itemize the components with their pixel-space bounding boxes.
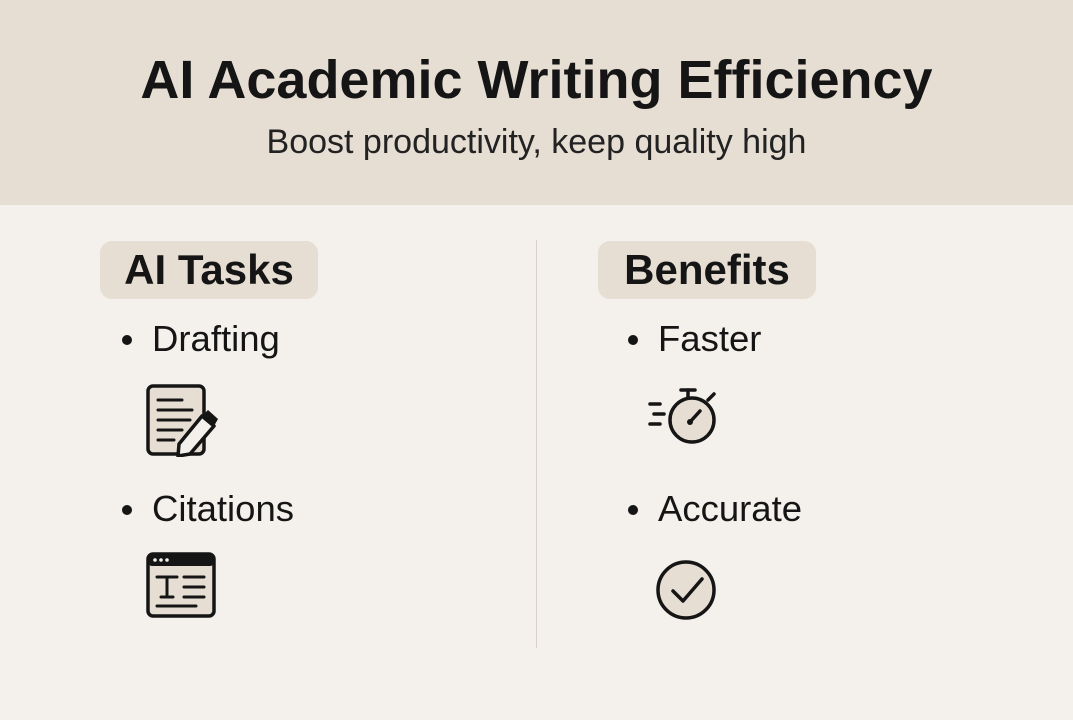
icon: stopwatch <box>648 388 716 444</box>
divider <box>536 240 537 648</box>
icon: check circle <box>656 560 716 620</box>
panel: AI Tasks <box>100 241 318 618</box>
item: Drafting: Drafting <box>152 318 280 359</box>
heading: AI Tasks: AI Tasks <box>124 246 294 293</box>
icon: text window <box>146 552 216 618</box>
heading: Benefits: Benefits <box>624 246 790 293</box>
header band <box>0 0 1073 205</box>
item: Citations: Citations <box>152 488 294 529</box>
item: Accurate: Accurate <box>658 488 802 529</box>
panel: Benefits <box>598 241 816 620</box>
icon: document with pencil <box>146 384 218 457</box>
title: AI Academic Writing Efficiency <box>140 50 933 110</box>
heading: AI Tasks <box>100 241 318 299</box>
heading: Benefits <box>598 241 816 299</box>
subtitle: Boost productivity, keep quality high <box>267 123 806 161</box>
item: Faster: Faster <box>658 318 761 359</box>
